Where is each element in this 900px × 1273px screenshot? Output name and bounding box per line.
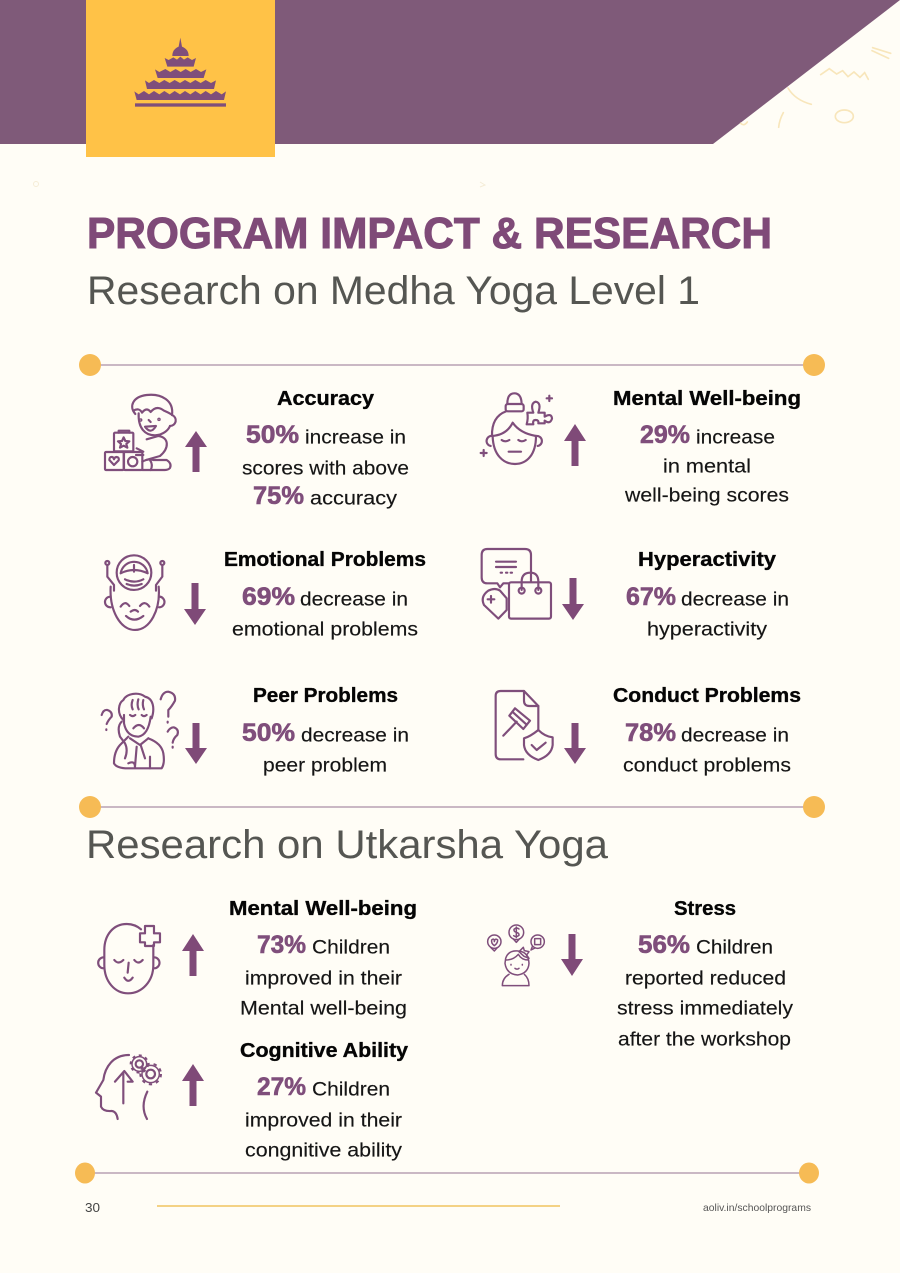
stat text: stress immediately xyxy=(617,998,793,1020)
title: PROGRAM IMPACT & RESEARCH xyxy=(87,209,772,258)
stat text: Mental well-being xyxy=(240,998,407,1020)
icon: head profile with gears xyxy=(96,1055,161,1119)
stat text: after the workshop xyxy=(618,1028,791,1050)
heading: Mental Well-being: Mental Well-being xyxy=(613,388,801,410)
stat text: 78% xyxy=(625,719,676,747)
header banner xyxy=(0,0,900,144)
stat text: Children xyxy=(312,1078,390,1100)
arrow down xyxy=(185,723,207,764)
panel: cognitive ability xyxy=(96,1040,409,1162)
icon: calm head with plus xyxy=(98,924,160,993)
heading: Conduct Problems: Conduct Problems xyxy=(613,685,801,707)
heading: Hyperactivity: Hyperactivity xyxy=(638,549,777,571)
stat text xyxy=(617,931,793,1050)
stat text: scores with above xyxy=(242,458,409,480)
stat text: increase xyxy=(696,426,775,448)
stat text xyxy=(245,1073,403,1162)
stat text xyxy=(626,583,789,640)
stat text: 50% xyxy=(242,719,295,747)
stat text xyxy=(242,421,409,510)
stat text: decrease in xyxy=(300,588,408,610)
stat text: 67% xyxy=(626,583,676,611)
panel: stress xyxy=(488,898,793,1050)
icon: child with blocks xyxy=(105,395,176,470)
heading: Cognitive Ability: Cognitive Ability xyxy=(240,1040,409,1062)
stat text: conduct problems xyxy=(623,754,791,776)
stat text: increase in xyxy=(305,426,406,448)
stat text: Children xyxy=(312,936,390,958)
panel: accuracy xyxy=(105,388,409,510)
panel: emotional problems xyxy=(105,549,426,640)
heading: Stress: Stress xyxy=(674,898,736,920)
stat text: decrease in xyxy=(301,724,409,746)
stat text: decrease in xyxy=(681,588,789,610)
stat text: in mental xyxy=(663,456,751,478)
divider middle xyxy=(79,796,825,818)
footer rule xyxy=(157,1205,560,1207)
logo panel xyxy=(86,0,275,157)
icon: girl with thought bubbles xyxy=(488,925,544,986)
heading: Emotional Problems: Emotional Problems xyxy=(224,549,426,571)
arrow down xyxy=(561,934,583,976)
stat text: improved in their xyxy=(245,1110,403,1132)
stat text: improved in their xyxy=(245,968,403,990)
stat text: peer problem xyxy=(263,754,387,776)
stat text xyxy=(242,719,409,776)
arrow up xyxy=(185,431,207,472)
subtitle: Medha Yoga: Research on Medha Yoga Level 1 xyxy=(87,269,700,313)
panel: peer problems xyxy=(102,685,409,776)
icon: calm face with puzzle xyxy=(481,393,552,464)
stat text xyxy=(240,931,407,1020)
arrow down xyxy=(562,578,584,620)
stat text: 27% xyxy=(257,1073,306,1101)
stat text: congnitive ability xyxy=(245,1140,402,1162)
icon: temple logo xyxy=(134,38,226,107)
divider bottom xyxy=(75,1162,819,1184)
stat text: reported reduced xyxy=(625,968,786,990)
stat text: 73% xyxy=(257,931,306,959)
panel: mental well-being xyxy=(481,388,801,506)
arrow up xyxy=(182,1064,204,1106)
arrow down xyxy=(184,583,206,625)
stat text: hyperactivity xyxy=(647,618,767,640)
stat text: 29% xyxy=(640,421,690,449)
stat text: 69% xyxy=(242,583,295,611)
icon: worried boy with question marks xyxy=(102,692,178,768)
stat text: 50% xyxy=(246,421,299,449)
page number: 30 xyxy=(85,1201,100,1215)
stat text xyxy=(623,719,791,776)
panel: conduct problems xyxy=(496,685,801,776)
footer url: aoliv.in/schoolprograms xyxy=(703,1202,811,1214)
icon: speech bubble, heart and bag xyxy=(482,549,551,619)
heading: Mental Well-being: Mental Well-being xyxy=(229,898,417,920)
stat text: accuracy xyxy=(310,488,397,510)
stat text: emotional problems xyxy=(232,618,418,640)
stat text: 56% xyxy=(638,931,690,959)
arrow down xyxy=(564,723,586,764)
panel: hyperactivity xyxy=(482,549,789,640)
panel: utkarsha mental well-being xyxy=(98,898,417,1020)
stat text xyxy=(232,583,418,640)
arrow up xyxy=(182,934,204,976)
heading: Peer Problems: Peer Problems xyxy=(253,685,398,707)
icon: head with gauge xyxy=(105,555,164,630)
stat text: 75% xyxy=(253,482,304,510)
arrow up xyxy=(564,424,586,466)
stat text: well-being scores xyxy=(624,484,789,506)
heading: Accuracy: Accuracy xyxy=(277,388,375,410)
icon: document with gavel and shield xyxy=(496,691,553,760)
stat text xyxy=(624,421,789,506)
stat text: Children xyxy=(696,936,773,958)
subtitle: Utkarsha Yoga: Research on Utkarsha Yoga xyxy=(86,823,609,867)
stat text: decrease in xyxy=(681,724,789,746)
divider top xyxy=(79,354,825,376)
